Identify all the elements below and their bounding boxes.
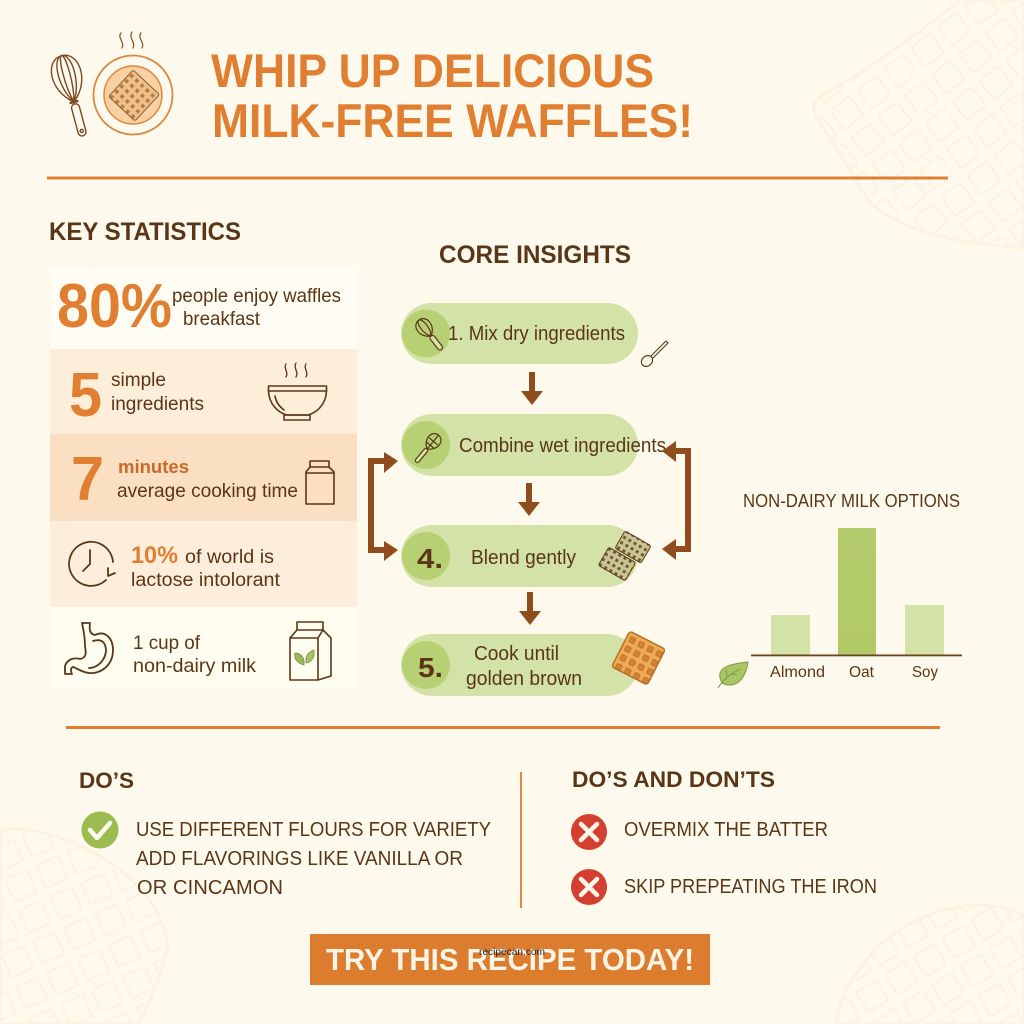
stat row: 1 cup non-dairy milk: 1 cup of [133,632,201,654]
step 5 pill: golden brown [466,668,582,690]
stat row: 80%: breakfast [183,308,261,330]
chart: non-dairy milk options [743,491,962,681]
stat row: 80% [50,268,357,349]
header icon: whisk [47,52,97,140]
heading: key statistics: KEY STATISTICS [49,218,241,246]
step 4 pill: Blend gently [471,547,576,569]
bar: soy [905,605,944,655]
step 5 pill [401,631,665,696]
stat row: 1 cup non-dairy milk [50,607,357,688]
stat row: 5 ingredients: simple [111,369,166,391]
icon: two waffles [598,531,651,581]
axis labels: Soy [912,664,938,681]
panel: do's and don'ts: OVERMIX THE BATTER [624,819,828,841]
step 1 pill: 1. Mix dry ingredients [448,323,625,345]
icon: cross [571,869,607,905]
panel: key statistics [50,268,357,688]
title [211,44,693,147]
arrow: left loop [371,452,398,561]
icon: milk carton with leaf [290,622,331,680]
panel: do's [79,768,491,899]
icon: steaming bowl [268,363,326,420]
step 2 pill: Combine wet ingredients [459,435,666,457]
panel: do's: USE DIFFERENT FLOURS FOR VARIETY [136,819,491,841]
stat row: 5 ingredients [50,349,357,434]
axis labels: Oat [849,664,875,681]
arrow: right loop [662,441,688,560]
process flow [371,303,688,696]
background waffle: bottom left [0,829,168,1024]
stat row: 5 ingredients: 5 [69,361,102,430]
arrow: step 4 to 5 [519,592,541,625]
icon: milk jar [306,461,334,504]
axis labels: Almond [770,664,825,681]
title: MILK-FREE WAFFLES! [212,94,693,147]
chart: non-dairy milk options: NON-DAIRY MILK OPTIONS [743,491,960,511]
bar: almond [771,615,810,655]
background waffle: bottom right [836,905,1024,1024]
title: WHIP UP DELICIOUS [211,44,654,97]
panel: do's: OR CINCAMON [137,877,283,899]
call to action button [310,934,710,985]
axis labels [770,664,938,681]
stat row: 10% lactose: of world is [185,546,274,568]
step 4 pill: 4. [417,543,443,574]
panel: do's and don'ts [571,767,877,905]
icon: clock [69,542,115,586]
arrow: step 2 to 4 [518,483,540,516]
stat row: 80%: 80% [57,272,172,341]
watermark: recipecan.com [479,946,545,958]
step 4 pill [401,525,651,587]
stat row: 1 cup non-dairy milk: non-dairy milk [133,655,256,677]
panel: do's: ADD FLAVORINGS LIKE VANILLA OR [136,848,463,870]
icon: leaf [718,662,748,688]
icon: check [82,812,118,848]
stat row: 7 minutes: 7 [71,445,104,514]
stat row: 5 ingredients: ingredients [111,393,204,415]
stat row: 10% lactose: 10% [131,542,178,569]
bar: oat [838,528,876,655]
stat row: 7 minutes [50,434,357,521]
heading: core insights: CORE INSIGHTS [439,241,631,269]
background waffle: top right [813,0,1024,248]
step 1 pill [401,303,638,364]
panel: do's: DO’S [79,768,134,793]
icon: spoon [639,341,668,369]
icon: whisk [413,316,447,354]
stat row: 7 minutes: average cooking time [117,480,298,502]
header icon: waffle on plate with steam [94,32,172,134]
panel: do's and don'ts: DO’S AND DON’TS [572,767,775,792]
icon: cross [571,814,607,850]
step 5 pill: Cook until [474,643,559,665]
icon: golden waffle [612,631,665,685]
stat row: 10% lactose [50,521,357,607]
stat row: 10% lactose: lactose intolorant [131,569,281,591]
stat row: 7 minutes: minutes [118,457,189,477]
icon: stomach [65,623,113,674]
step 2 pill [401,414,666,476]
stat row: 80%: people enjoy waffles [172,285,341,307]
arrow: step 1 to 2 [521,372,543,405]
panel: do's and don'ts: SKIP PREPEATING THE IRON [624,876,877,898]
icon: whisk [411,431,444,466]
call to action button: TRY THIS RECIPE TODAY! [326,942,694,977]
step 5 pill: 5. [418,652,443,683]
